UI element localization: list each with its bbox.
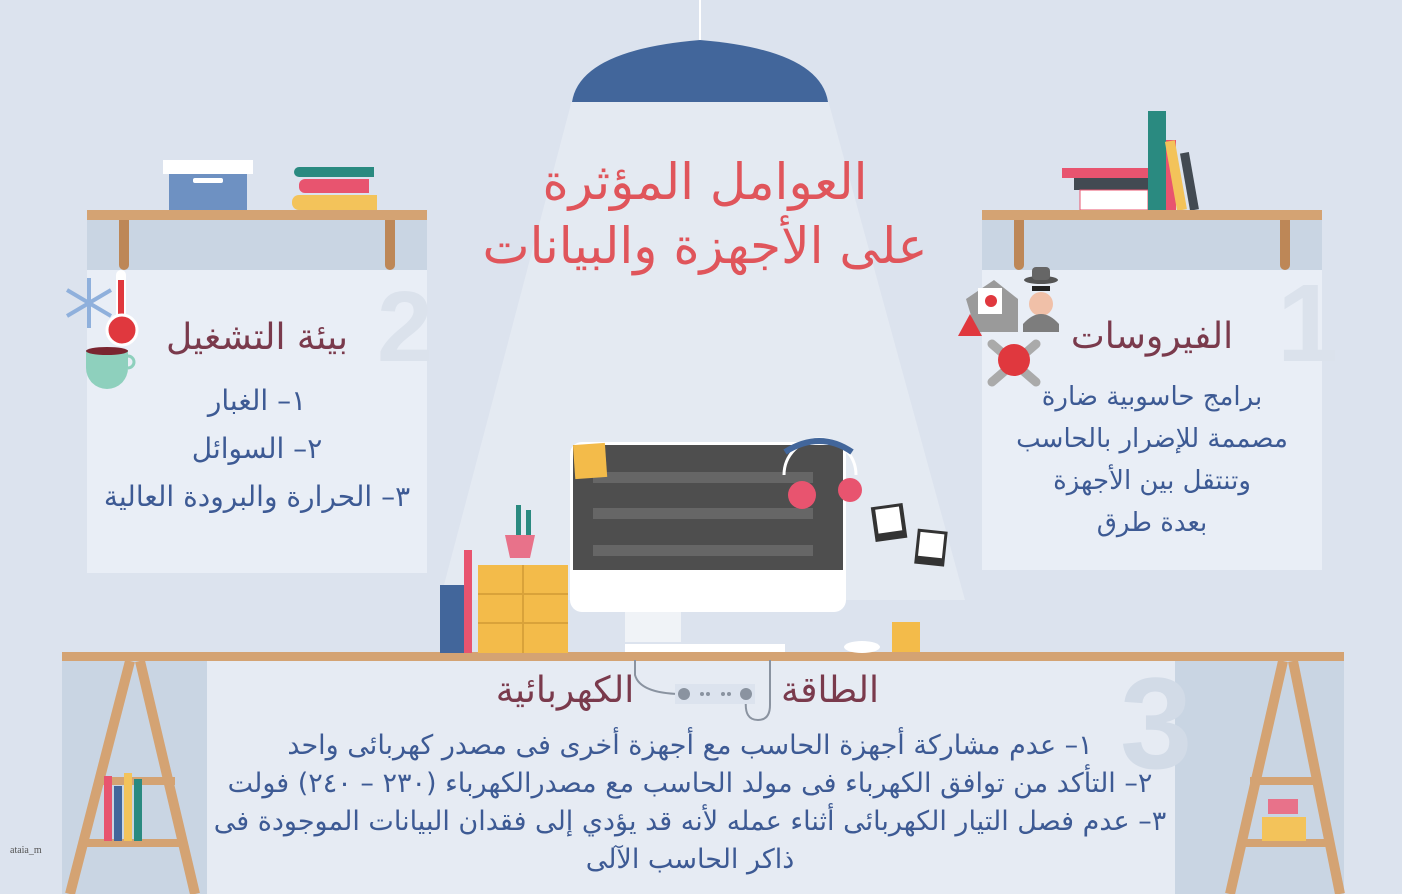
description: مصممة للإضرار بالحاسب [1016, 424, 1288, 454]
computer [440, 438, 948, 653]
shelf items [163, 160, 253, 210]
heading: power: الطاقة [781, 670, 879, 711]
number 3: 3 [1120, 650, 1192, 796]
signature: ataia_m [10, 845, 42, 856]
power list: ٣– عدم فصل التيار الكهربائى أثناء عمله لأنه قد يؤدي إلى فقدان البيانات الموجودة فى [214, 806, 1166, 837]
title [483, 153, 927, 276]
panel: viruses: 1 [1277, 262, 1338, 385]
list [104, 384, 410, 513]
icon: snowflake thermometer cup [66, 270, 138, 389]
description: وتنتقل بين الأجهزة [1053, 466, 1251, 496]
text: الكهربائية [496, 670, 634, 711]
list: ٣– الحرارة والبرودة العالية [104, 480, 410, 513]
title: على الأجهزة والبيانات [483, 217, 927, 275]
panel: viruses [982, 111, 1338, 570]
description [1016, 382, 1288, 538]
icon: virus hacker [958, 267, 1059, 386]
heading: بيئة التشغيل [166, 317, 348, 358]
heading: الفيروسات [1071, 316, 1233, 357]
title: العوامل المؤثرة [542, 153, 868, 211]
desk scene [62, 652, 1344, 894]
panel: operating environment [87, 160, 433, 573]
power list [214, 727, 1166, 875]
power list: ٢– التأكد من توافق الكهرباء فى مولد الحاسب مع مصدرالكهرباء (٢٣٠ – ٢٤٠) فولت [228, 768, 1152, 799]
power list: ١– عدم مشاركة أجهزة الحاسب مع أجهزة أخرى فى مصدر كهربائى واحد [287, 730, 1093, 761]
list: ١– الغبار [208, 384, 306, 417]
lamp [572, 0, 828, 102]
panel: operating environment: 2 [377, 271, 433, 383]
description: برامج حاسوبية ضارة [1042, 382, 1262, 412]
description: بعدة طرق [1097, 508, 1207, 538]
books [1062, 111, 1199, 210]
power list: ذاكر الحاسب الآلى [586, 844, 794, 875]
power cable & socket [634, 660, 771, 721]
desk legs [65, 661, 1345, 894]
list: ٢– السوائل [192, 432, 322, 465]
